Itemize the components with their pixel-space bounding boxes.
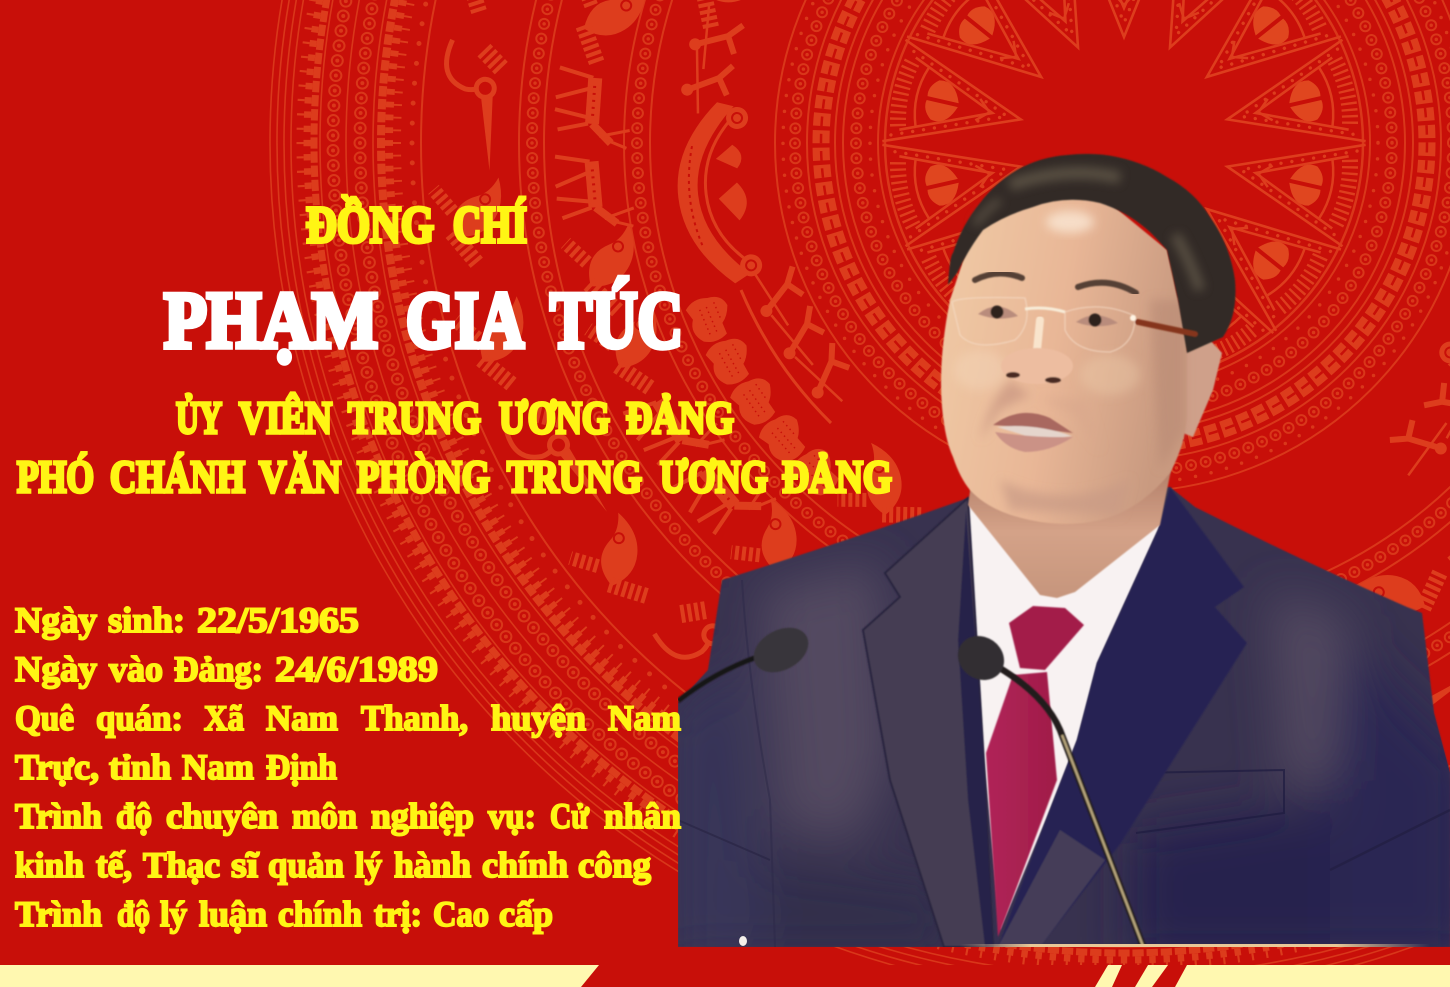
lectern edge highlight	[960, 944, 1430, 947]
biography text block: Trình	[15, 796, 102, 836]
biography text block: chính	[278, 894, 362, 934]
biography text block: cấp	[499, 894, 553, 934]
title: comrade	[306, 194, 527, 254]
biography text block: quán:	[96, 698, 183, 738]
biography text block: trị:	[374, 894, 422, 934]
bottom band right with stripes	[1095, 965, 1450, 987]
nose	[1001, 320, 1073, 384]
mouth	[993, 413, 1073, 452]
position line 2	[17, 451, 892, 502]
biography text block: nhân	[604, 796, 681, 836]
face	[941, 195, 1187, 524]
white spot	[739, 936, 747, 946]
shirt	[968, 500, 1160, 930]
biography text block: Thạc	[143, 845, 220, 885]
biography text block: Nam	[182, 747, 254, 787]
title: comrade: ĐỒNG	[306, 194, 434, 254]
position line 1: ƯƠNG	[499, 392, 610, 443]
biography text block: Ngày	[15, 649, 97, 689]
name: PHẠM	[164, 277, 378, 365]
position line 1: ĐẢNG	[626, 392, 734, 443]
biography text block: 24/6/1989	[275, 649, 438, 689]
left lapel	[863, 498, 993, 947]
suit light and shadow	[670, 560, 1450, 960]
biography text block: công	[578, 845, 651, 885]
left microphone	[678, 628, 809, 704]
face shading	[954, 300, 1185, 515]
biography text block: sĩ	[231, 845, 259, 885]
biography text block: Xã	[204, 698, 244, 738]
biography text block: lý	[355, 845, 382, 885]
bottom band left	[0, 965, 599, 987]
biography text block: Trình	[15, 894, 102, 934]
position line 1	[176, 392, 734, 443]
biography text block: luận	[199, 894, 267, 934]
biography text block: chính	[482, 845, 568, 885]
biography text block: vào	[109, 649, 163, 689]
biography text block: tế,	[96, 845, 132, 885]
biography text block: quản	[268, 845, 344, 885]
portrait photo of the official	[670, 154, 1450, 960]
title: comrade: CHÍ	[453, 196, 527, 254]
biography text block: Thanh,	[361, 698, 468, 738]
biography text block: Đảng:	[174, 649, 263, 689]
neck	[968, 465, 1172, 598]
biography text block: kinh	[15, 845, 84, 885]
position line 2: CHÁNH	[110, 451, 245, 502]
biography text block: hành	[394, 845, 471, 885]
name: GIA	[406, 277, 524, 365]
suit jacket	[678, 487, 1450, 947]
position line 1: ỦY	[176, 392, 222, 443]
name: TÚC	[550, 277, 683, 365]
biography text block: Trực,	[15, 747, 99, 787]
biography text block: Quê	[15, 698, 74, 738]
biography text block: Định	[266, 747, 337, 787]
biography text block: tỉnh	[109, 747, 171, 787]
biography text block	[15, 600, 681, 934]
biography text block: nghiệp	[371, 796, 474, 836]
position line 2: VĂN	[259, 451, 341, 502]
biography text block: độ	[116, 796, 152, 836]
tie	[986, 606, 1084, 937]
biography text block: chuyên	[166, 796, 278, 836]
glasses	[952, 298, 1195, 352]
position line 2: TRUNG	[507, 451, 642, 502]
position line 2: ƯƠNG	[660, 451, 768, 502]
ear	[1183, 340, 1222, 437]
biography text block: Nam	[608, 698, 681, 738]
hair	[948, 154, 1236, 353]
biography text block: độ	[117, 894, 150, 934]
biography text block: vụ:	[488, 796, 536, 836]
hair highlights	[975, 173, 1200, 290]
biography text block: Cao	[433, 894, 489, 934]
biography text block: sinh:	[108, 600, 185, 640]
eyebrows	[975, 273, 1136, 293]
biography text block: môn	[292, 796, 357, 836]
name	[164, 277, 683, 365]
biography text block: Ngày	[15, 600, 97, 640]
biography text block: 22/5/1965	[197, 600, 359, 640]
eyes	[978, 306, 1118, 326]
biography text block: lý	[160, 894, 187, 934]
biography text block: huyện	[491, 698, 586, 738]
position line 1: VIÊN	[239, 392, 332, 443]
position line 2: PHÒNG	[357, 451, 490, 502]
forehead highlight	[1046, 211, 1094, 233]
position line 2: PHÓ	[17, 451, 94, 502]
position line 1: TRUNG	[348, 392, 481, 443]
biography text block: Cử	[550, 796, 589, 836]
biography text block: Nam	[266, 698, 338, 738]
right microphone	[949, 627, 1143, 946]
position line 2: ĐẢNG	[782, 451, 892, 502]
right lapel	[998, 487, 1247, 947]
